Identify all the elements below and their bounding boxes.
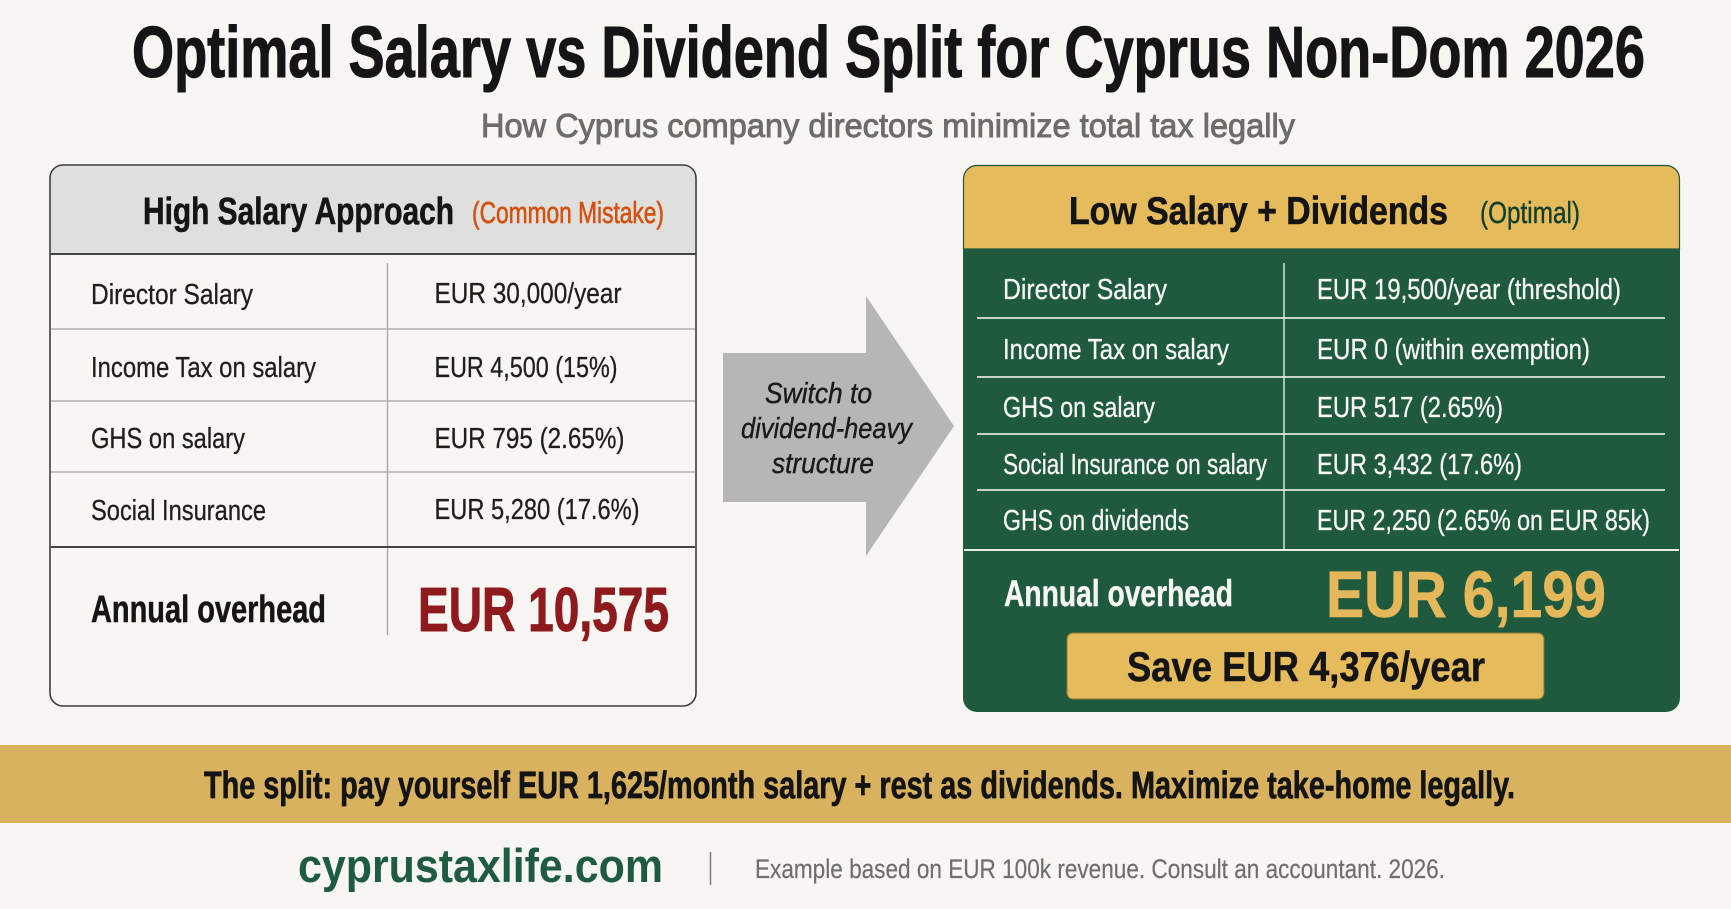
arrow: switch to dividend-heavy structure: structure	[772, 448, 874, 480]
row: income tax: EUR 4,500 (15%)	[434, 352, 618, 384]
total: annual overhead optimal: Annual overhead	[1004, 573, 1233, 614]
panel header: high salary: (Common Mistake)	[472, 195, 664, 230]
row: GHS on dividends	[1003, 505, 1650, 537]
row: GHS on salary optimal: EUR 517 (2.65%)	[1317, 392, 1503, 424]
row: income tax: Income Tax on salary	[91, 352, 316, 384]
row: social insurance	[91, 494, 640, 527]
total: annual overhead optimal	[1004, 557, 1606, 631]
row: director salary: EUR 30,000/year	[434, 278, 622, 310]
callout: savings: Save EUR 4,376/year	[1127, 643, 1485, 690]
total: annual overhead high salary	[91, 576, 669, 645]
row: income tax optimal: EUR 0 (within exemption)	[1317, 334, 1590, 366]
callout: savings	[1067, 633, 1544, 699]
footer brand: cyprustaxlife.com	[298, 839, 663, 892]
row: income tax optimal: Income Tax on salary	[1003, 334, 1229, 366]
row: GHS on dividends: GHS on dividends	[1003, 505, 1189, 537]
arrow: switch to dividend-heavy structure: dividend-heavy	[741, 413, 913, 445]
row: income tax optimal	[1003, 334, 1590, 366]
panel header: high salary: High Salary Approach	[143, 191, 454, 233]
row: director salary optimal: Director Salary	[1003, 274, 1167, 306]
row: GHS on salary optimal	[1003, 392, 1503, 424]
panel: low salary plus dividends	[963, 165, 1680, 712]
row: GHS: EUR 795 (2.65%)	[434, 423, 624, 455]
row: GHS on dividends: EUR 2,250 (2.65% on EUR 85k)	[1317, 505, 1650, 537]
arrow: switch to dividend-heavy structure: Switch to	[765, 378, 872, 410]
subtitle: How Cyprus company directors minimize total tax legally	[481, 107, 1295, 144]
panel header: low salary: (Optimal)	[1480, 195, 1580, 230]
total: annual overhead high salary: Annual overhead	[91, 589, 326, 631]
row: social insurance: EUR 5,280 (17.6%)	[434, 494, 640, 526]
total: annual overhead high salary: EUR 10,575	[418, 576, 669, 645]
row: income tax	[91, 352, 618, 384]
banner: the split	[0, 745, 1731, 823]
row: GHS on salary optimal: GHS on salary	[1003, 392, 1155, 424]
footer	[298, 839, 1445, 892]
row: social insurance: Social Insurance	[91, 495, 266, 527]
panel header: low salary	[964, 166, 1680, 249]
row: social insurance optimal	[1003, 449, 1522, 481]
row: director salary optimal	[1003, 274, 1621, 306]
row: director salary	[91, 278, 622, 311]
arrow: switch to dividend-heavy structure	[723, 296, 954, 556]
total: annual overhead optimal: EUR 6,199	[1326, 557, 1606, 631]
panel header: low salary: Low Salary + Dividends	[1069, 190, 1448, 233]
footer note: Example based on EUR 100k revenue. Consult an accountant. 2026.	[755, 854, 1445, 884]
row: director salary optimal: EUR 19,500/year (threshold)	[1317, 274, 1621, 306]
row: GHS: GHS on salary	[91, 423, 245, 455]
row: GHS	[91, 423, 624, 455]
panel: high salary approach	[50, 165, 696, 706]
panel header: high salary	[50, 166, 696, 254]
row: director salary: Director Salary	[91, 279, 253, 311]
row: social insurance optimal: Social Insurance on salary	[1003, 449, 1267, 481]
row: social insurance optimal: EUR 3,432 (17.6%)	[1317, 449, 1522, 481]
